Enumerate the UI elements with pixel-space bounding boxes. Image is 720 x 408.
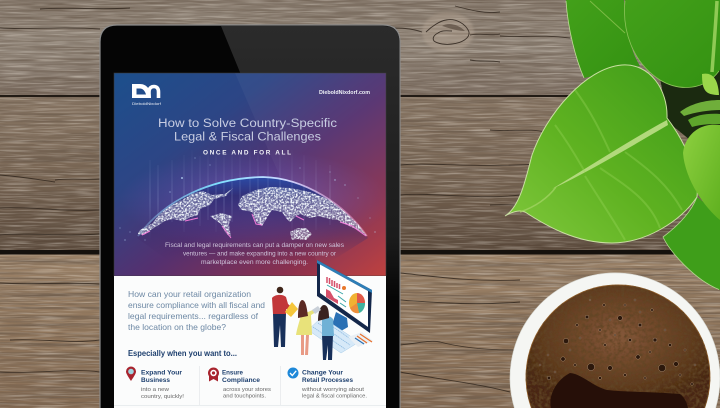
benefit: change your retail processes: Change Your: [302, 370, 344, 376]
benefit: change your retail processes: [288, 368, 367, 400]
white content panel: [114, 276, 386, 408]
hero description: marketplace even more challenging.: [201, 259, 308, 266]
leaf: stem curl: [680, 74, 720, 127]
logo wordmark: DieboldNixdorf: [132, 102, 161, 106]
keyboard: [308, 317, 359, 353]
title: [158, 116, 337, 144]
question text: legal requirements... regardless of: [128, 311, 259, 321]
continent magenta edges: [142, 214, 366, 238]
leaf: main: [505, 65, 697, 243]
benefit: expand your business: [126, 366, 184, 400]
leaf: bottom right: [663, 197, 720, 290]
benefit: change your retail processes: legal & fiscal compliance.: [302, 394, 367, 400]
monitor bars: [327, 277, 340, 289]
continent: australia: [290, 228, 312, 240]
cup rim: [510, 273, 720, 408]
leaf: top left: [566, 0, 640, 78]
question text: [128, 289, 265, 332]
title: Legal & Fiscal Challenges: [174, 130, 321, 144]
particles: [120, 158, 376, 241]
hero description: Fiscal and legal requirements can put a damper on new sales: [165, 242, 344, 249]
bezel glare: [221, 26, 399, 408]
monitor pie chart: [349, 293, 365, 313]
small phone held: [312, 306, 321, 314]
globe illustration: [120, 144, 390, 262]
benefit: expand your business: Business: [141, 377, 170, 384]
benefit: ensure compliance: and touchpoints.: [223, 394, 266, 400]
glare on hero: [235, 73, 386, 276]
benefit: ensure compliance: Compliance: [222, 377, 260, 384]
icon: target ribbon: [208, 368, 219, 382]
logo mark: [132, 84, 158, 98]
benefit: ensure compliance: across your stores: [223, 387, 271, 393]
tablet body: [100, 25, 400, 408]
benefit: ensure compliance: Ensure: [222, 370, 243, 376]
section heading: Especially when you want to...: [128, 349, 237, 358]
hero panel: [114, 73, 390, 276]
coffee surface: [526, 285, 710, 408]
benefit: expand your business: country, quickly!: [141, 394, 184, 400]
continent: south america: [210, 213, 232, 238]
benefit: change your retail processes: without worrying about: [302, 387, 365, 393]
subtitle: ONCE AND FOR ALL: [203, 150, 291, 156]
person: woman in blue: [318, 305, 334, 360]
website url: DieboldNixdorf.com: [319, 90, 370, 96]
tablet held by man: [285, 302, 298, 317]
continent: north america: [138, 188, 233, 235]
papers and pencils: [348, 332, 373, 347]
question text: the location on the globe?: [128, 322, 226, 332]
coffee dark reflection: [550, 373, 688, 408]
icon: check badge: [288, 368, 298, 378]
logo: [132, 84, 161, 106]
tablet: [100, 25, 400, 408]
coffee cup: [510, 273, 720, 408]
question text: ensure compliance with all fiscal and: [128, 300, 265, 310]
plant: [505, 0, 720, 290]
hero description: [165, 242, 344, 266]
benefit: expand your business: Expand Your: [141, 370, 183, 376]
monitor: [317, 260, 372, 333]
monitor stand: [332, 312, 348, 331]
benefit: ensure compliance: [208, 368, 271, 400]
person: man in red: [272, 287, 294, 347]
icon: location pin: [126, 366, 136, 381]
person: woman in yellow: [296, 300, 316, 355]
hero description: ventures — and make expanding into a new country or: [183, 250, 336, 258]
coffee bubbles: [539, 299, 696, 385]
title: How to Solve Country-Specific: [158, 116, 337, 130]
leaf: top right: [624, 0, 720, 87]
question text: How can your retail organization: [128, 289, 251, 299]
benefit: expand your business: into a new: [141, 387, 169, 393]
leaf: right: [683, 125, 720, 220]
continent: eurasia and africa: [238, 187, 367, 236]
plant centre shadow: [660, 68, 720, 140]
illustration: team at monitor: [272, 260, 373, 360]
benefit: change your retail processes: Retail Processes: [302, 377, 353, 384]
